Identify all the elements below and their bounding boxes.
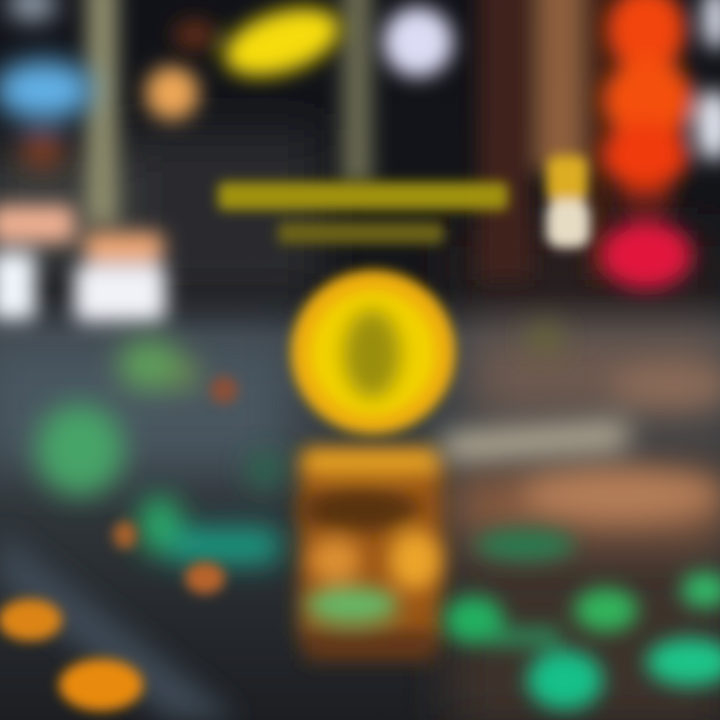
diagonal road stripe: [0, 530, 240, 720]
coin: [291, 270, 455, 434]
green scattered shapes right: [444, 529, 720, 710]
lamp: orange circle: [145, 66, 199, 120]
sign: red orange column: [600, 0, 720, 289]
lantern: yellow and white: [546, 155, 590, 248]
left shop awnings: [0, 205, 166, 322]
sign: yellow blob: [173, 0, 348, 89]
street highlights: [439, 324, 720, 521]
sign: blue glow top left: [0, 0, 94, 166]
orange scattered coins left: [0, 376, 238, 711]
heading: [218, 182, 508, 244]
coin stack: [300, 450, 442, 660]
background columns: [86, 0, 610, 280]
lamp: white lavender globe: [383, 7, 453, 77]
green scattered shapes left: [36, 339, 283, 564]
